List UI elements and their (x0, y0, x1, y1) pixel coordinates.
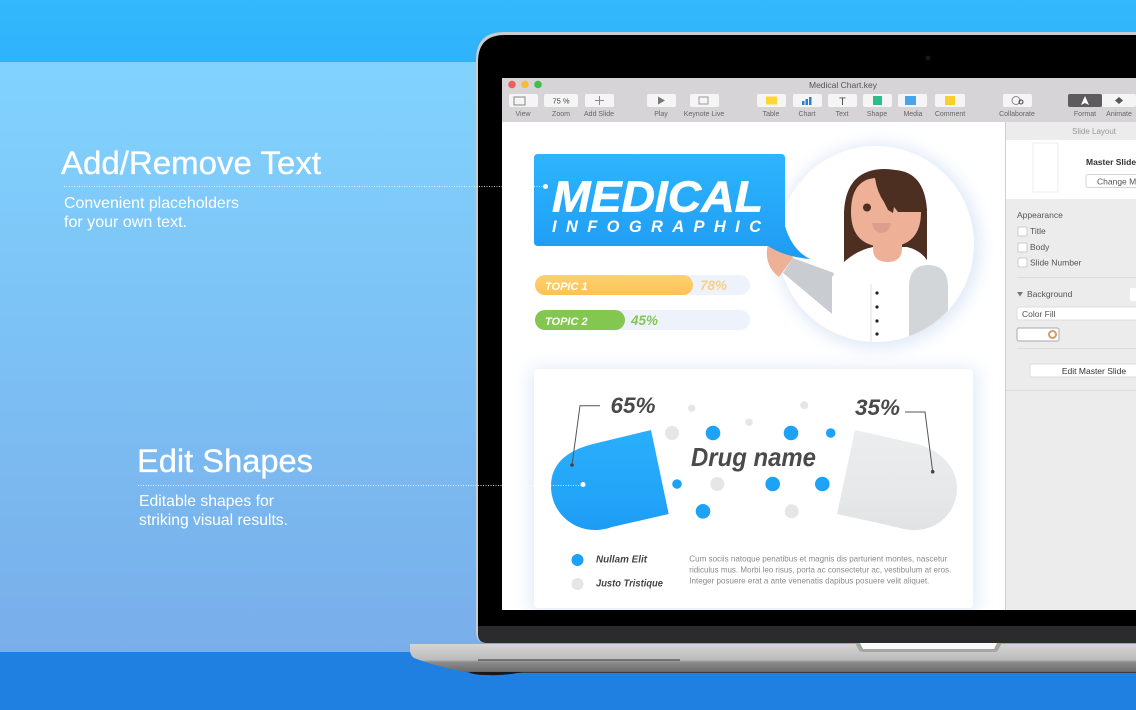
progress bar: topic 1 (535, 275, 750, 295)
background: bottom band (0, 652, 1136, 710)
traffic light: zoom (534, 81, 542, 88)
blue particles (672, 426, 836, 519)
description: Editable shapes for (139, 493, 275, 510)
description (139, 493, 288, 529)
body text: Integer posuere erat a ante venenatis dapibus posuere velit aliquet. (689, 575, 929, 585)
presenter face (851, 178, 921, 247)
callout: add/remove text (61, 145, 548, 231)
toolbar labels: Chart (798, 111, 816, 118)
drug card (534, 369, 973, 608)
toolbar icons: T (839, 96, 846, 108)
presenter coat (832, 247, 927, 312)
toolbar labels: Zoom (552, 111, 570, 118)
callout: edit shapes (137, 443, 586, 529)
background section: Color Fill (1022, 309, 1056, 319)
document title: Medical Chart.key (809, 80, 878, 90)
toolbar buttons (509, 94, 1136, 107)
trackpad notch (855, 643, 1002, 652)
toolbar labels: Shape (867, 111, 887, 118)
appearance section: Appearance (1017, 210, 1063, 220)
grey capsule half (837, 430, 957, 530)
toolbar icons (514, 96, 1123, 106)
coat buttons (875, 291, 879, 336)
panel header: Slide Layout (1072, 127, 1117, 136)
drug name: Drug name (691, 442, 816, 472)
laptop lid (476, 32, 1136, 643)
card glow (530, 368, 978, 612)
presenter fringe (875, 170, 927, 213)
description: for your own text. (64, 214, 187, 231)
progress bar: topic 2 (535, 310, 750, 330)
presenter mouth (872, 223, 891, 233)
body text: ridiculus mus. Morbi leo risus, porta ac consectetur ac, vestibulum at eros. (689, 564, 951, 574)
legend (572, 554, 663, 590)
progress bar: topic 2: TOPIC 2 (545, 316, 588, 328)
toolbar labels: Play (654, 111, 668, 118)
description (64, 195, 239, 231)
appearance section: Body (1030, 242, 1050, 252)
presenter arm (783, 258, 834, 314)
appearance section: Title (1030, 226, 1046, 236)
body text: Cum sociis natoque penatibus et magnis dis parturient montes, nascetur (689, 554, 947, 564)
inspector side panel (1005, 122, 1136, 610)
camera (926, 56, 930, 60)
toolbar labels: Format (1074, 111, 1096, 118)
title: medical: MEDICAL (552, 172, 763, 222)
format button active (1068, 94, 1102, 107)
toolbar labels (515, 111, 1132, 118)
toolbar labels: Comment (935, 111, 965, 118)
progress bar: topic 1: 78% (700, 278, 727, 293)
heading: Add/Remove Text (61, 145, 321, 181)
traffic light: minimise (521, 81, 529, 88)
presenter hand (766, 246, 793, 277)
screen (502, 78, 1136, 612)
window title bar and toolbar (502, 78, 1136, 122)
toolbar labels: Add Slide (584, 111, 614, 118)
grey particles (665, 401, 808, 518)
toolbar icons: 75 % (552, 96, 570, 106)
presenter neck (873, 244, 902, 262)
laptop (410, 32, 1136, 675)
heading: Edit Shapes (137, 443, 313, 479)
coat placket (870, 284, 872, 342)
legend: Nullam Elit (596, 554, 648, 566)
laptop base (410, 644, 1136, 673)
label: 35% with leader: 35% (855, 395, 900, 420)
base highlight line (478, 659, 680, 661)
subtitle: infographic: INFOGRAPHIC (552, 218, 762, 236)
presenter hair (844, 169, 927, 262)
background: top band (0, 0, 1136, 62)
label: 65% with leader (570, 393, 656, 467)
progress bar: topic 1: TOPIC 1 (545, 281, 588, 293)
presenter eye (863, 204, 871, 212)
slide canvas (502, 122, 1005, 612)
presenter sleeve (909, 265, 948, 336)
master slide section (1006, 140, 1136, 199)
edit master slide button (1030, 364, 1136, 377)
toolbar labels: Table (763, 111, 779, 118)
toolbar labels: Media (903, 111, 923, 118)
base foot shadow (468, 672, 522, 675)
legend: Justo Tristique (596, 579, 663, 590)
connector (138, 482, 586, 487)
edit master slide button: Edit Master Slide (1062, 366, 1126, 376)
toolbar labels: View (515, 111, 531, 118)
toolbar labels: Collaborate (999, 111, 1035, 118)
progress bar: topic 2: 45% (630, 313, 658, 328)
appearance section (1017, 210, 1082, 268)
background section: Background (1027, 289, 1073, 299)
portrait circle (767, 146, 974, 360)
toolbar labels: Text (836, 111, 848, 118)
circle glow (777, 145, 979, 347)
master slide section: Master Slide (1086, 157, 1136, 167)
traffic light: close (508, 81, 516, 88)
body text (689, 554, 951, 585)
description: striking visual results. (139, 512, 288, 529)
connector (64, 184, 548, 189)
label: 35% with leader (855, 395, 934, 474)
blue capsule half (551, 430, 669, 530)
toolbar labels: Animate (1106, 111, 1132, 118)
appearance section: Slide Number (1030, 258, 1082, 268)
label: 65% with leader: 65% (610, 393, 656, 418)
background section (1017, 288, 1136, 341)
description: Convenient placeholders (64, 195, 239, 212)
toolbar labels: Keynote Live (684, 111, 724, 118)
title callout (534, 154, 810, 259)
lower bezel (478, 626, 1136, 643)
